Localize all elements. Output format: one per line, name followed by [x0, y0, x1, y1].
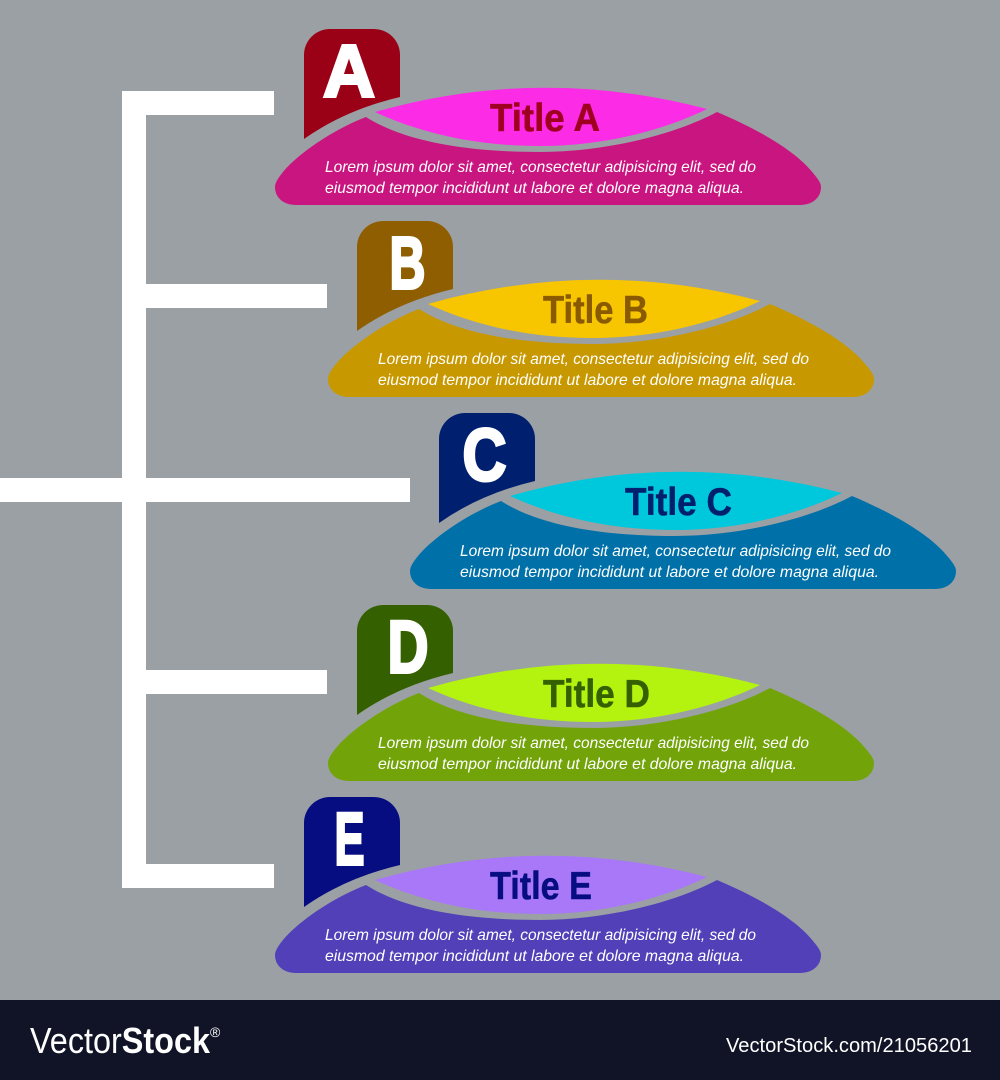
body shape E: [275, 880, 821, 973]
registered mark: ®: [210, 1024, 221, 1040]
title lens E: [375, 856, 707, 914]
body shape D: [328, 688, 874, 781]
letter B: B: [390, 222, 426, 304]
description E: Lorem ipsum dolor sit amet, consectetur adipisicing elit, sed do: [325, 927, 756, 944]
panel: option A: [275, 29, 821, 205]
description D: [378, 735, 809, 773]
title B: Title B: [543, 289, 648, 332]
panel: option C: [410, 413, 956, 589]
body shape A: [275, 112, 821, 205]
description A: eiusmod tempor incididunt ut labore et dolore magna aliqua.: [325, 180, 744, 197]
panel: option E: [275, 797, 821, 973]
footer band: [0, 1000, 1000, 1080]
title D: Title D: [543, 673, 650, 716]
footer logo: VectorStock: [30, 1020, 211, 1061]
badge C: [439, 413, 535, 523]
description E: [325, 927, 756, 965]
description B: [378, 351, 809, 389]
letter D: D: [388, 606, 428, 688]
badge D: [357, 605, 453, 715]
title A: Title A: [490, 97, 600, 140]
description A: [325, 159, 756, 197]
panel: option D: [328, 605, 874, 781]
description C: Lorem ipsum dolor sit amet, consectetur adipisicing elit, sed do: [460, 543, 891, 560]
footer id: VectorStock.com/21056201: [726, 1035, 972, 1057]
letter C: C: [462, 414, 506, 496]
letter E: E: [334, 798, 364, 880]
description C: eiusmod tempor incididunt ut labore et dolore magna aliqua.: [460, 564, 879, 581]
letter A: A: [323, 30, 375, 112]
description D: Lorem ipsum dolor sit amet, consectetur adipisicing elit, sed do: [378, 735, 809, 752]
title lens D: [428, 664, 760, 722]
description D: eiusmod tempor incididunt ut labore et dolore magna aliqua.: [378, 756, 797, 773]
description B: eiusmod tempor incididunt ut labore et dolore magna aliqua.: [378, 372, 797, 389]
panel: option B: [328, 221, 874, 397]
connector tree: [0, 91, 410, 888]
title lens A: [375, 88, 707, 146]
badge B: [357, 221, 453, 331]
description A: Lorem ipsum dolor sit amet, consectetur adipisicing elit, sed do: [325, 159, 756, 176]
badge A: [304, 29, 400, 139]
title E: Title E: [490, 865, 592, 908]
body shape C: [410, 496, 956, 589]
title lens C: [510, 472, 842, 530]
title C: Title C: [625, 481, 732, 524]
description E: eiusmod tempor incididunt ut labore et dolore magna aliqua.: [325, 948, 744, 965]
description B: Lorem ipsum dolor sit amet, consectetur adipisicing elit, sed do: [378, 351, 809, 368]
body shape B: [328, 304, 874, 397]
badge E: [304, 797, 400, 907]
title lens B: [428, 280, 760, 338]
description C: [460, 543, 891, 581]
